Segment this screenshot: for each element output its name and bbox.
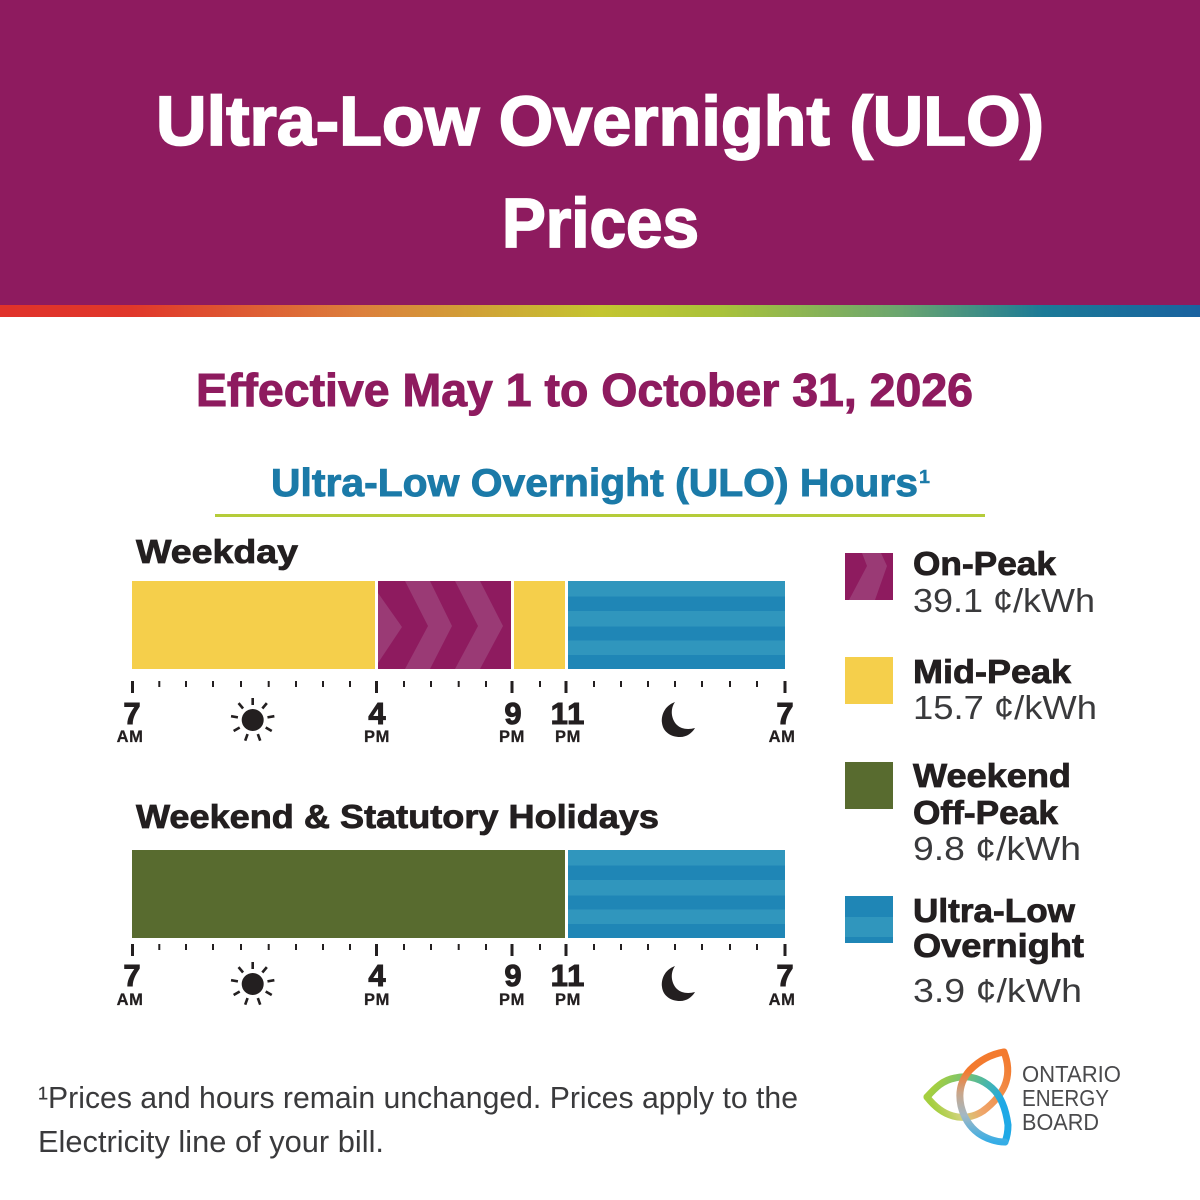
legend: weekend off-peak: Weekend bbox=[913, 757, 1071, 794]
legend: weekend off-peak bbox=[845, 757, 1081, 867]
legend: ultra-low overnight: 3.9 ¢/kWh bbox=[913, 972, 1082, 1009]
title: Ultra-Low Overnight (ULO) bbox=[156, 82, 1044, 160]
footnote bbox=[38, 1080, 798, 1159]
legend: on-peak: 39.1 ¢/kWh bbox=[913, 582, 1095, 619]
weekend time axis: AM bbox=[117, 991, 143, 1009]
rainbow gradient strip bbox=[0, 305, 1200, 317]
footnote: ¹Prices and hours remain unchanged. Prices apply to the bbox=[38, 1080, 798, 1115]
hours heading bbox=[215, 462, 985, 517]
legend: ultra-low overnight bbox=[845, 892, 1084, 1009]
weekday time axis: 9 bbox=[504, 696, 522, 731]
weekend time axis: 11 bbox=[551, 958, 585, 993]
logo wordmark: ONTARIO bbox=[1022, 1061, 1121, 1087]
weekday time axis: PM bbox=[364, 728, 390, 746]
legend: mid-peak: Mid-Peak bbox=[913, 653, 1072, 690]
weekend time axis: 9 bbox=[504, 958, 522, 993]
weekday time axis: 4 bbox=[368, 696, 386, 731]
logo wordmark bbox=[1022, 1061, 1121, 1135]
title: Prices bbox=[502, 184, 699, 262]
weekday time axis: 11 bbox=[551, 696, 585, 731]
weekday bar: mid-peak evening bbox=[514, 581, 565, 669]
icon: moon bbox=[662, 702, 695, 737]
weekday time axis: PM bbox=[499, 728, 525, 746]
weekday time axis: AM bbox=[117, 728, 143, 746]
footnote: Electricity line of your bill. bbox=[38, 1124, 384, 1159]
weekend time axis: PM bbox=[364, 991, 390, 1009]
legend: ultra-low overnight: Ultra-Low bbox=[913, 892, 1075, 929]
weekday heading: Weekday bbox=[136, 533, 299, 570]
legend: mid-peak: 15.7 ¢/kWh bbox=[913, 689, 1097, 726]
weekend time axis: 7 bbox=[776, 958, 794, 993]
panel: weekend schedule bbox=[117, 798, 795, 1009]
legend: weekend off-peak: 9.8 ¢/kWh bbox=[913, 830, 1081, 867]
weekday time axis: 7 bbox=[776, 696, 794, 731]
legend: weekend off-peak: Off-Peak bbox=[913, 794, 1059, 831]
weekend time axis: 7 bbox=[123, 958, 141, 993]
legend: on-peak bbox=[845, 545, 1095, 619]
weekend heading: Weekend & Statutory Holidays bbox=[136, 798, 659, 835]
hours heading: Ultra-Low Overnight (ULO) Hours bbox=[271, 462, 918, 505]
icon: moon bbox=[662, 966, 695, 1001]
icon: sun bbox=[231, 698, 274, 741]
weekend bar: off-peak bbox=[132, 850, 565, 938]
logo wordmark: ENERGY bbox=[1022, 1085, 1109, 1111]
weekend time axis: 4 bbox=[368, 958, 386, 993]
title bbox=[156, 82, 1044, 262]
weekend time axis: PM bbox=[499, 991, 525, 1009]
weekday bar: ultra-low overnight bbox=[568, 581, 785, 669]
icon: trefoil bbox=[927, 1052, 1008, 1142]
weekday time axis: AM bbox=[769, 728, 795, 746]
weekday bar: on-peak bbox=[378, 581, 511, 669]
header banner bbox=[0, 0, 1200, 305]
weekend time axis: AM bbox=[769, 991, 795, 1009]
weekday time axis: 7 bbox=[123, 696, 141, 731]
weekday time axis bbox=[117, 681, 795, 746]
weekday time axis: PM bbox=[555, 728, 581, 746]
logo: Ontario Energy Board bbox=[927, 1052, 1121, 1142]
panel: weekday schedule bbox=[117, 533, 795, 746]
icon: sun bbox=[231, 962, 274, 1005]
weekend bar: ultra-low overnight bbox=[568, 850, 785, 938]
logo wordmark: BOARD bbox=[1022, 1109, 1099, 1135]
weekday bar: mid-peak morning bbox=[132, 581, 375, 669]
panel: legend bbox=[845, 545, 1097, 1009]
legend: mid-peak bbox=[845, 653, 1097, 726]
weekend time axis bbox=[117, 944, 795, 1009]
legend: ultra-low overnight: Overnight bbox=[913, 927, 1084, 964]
effective date heading: Effective May 1 to October 31, 2026 bbox=[196, 364, 973, 416]
hours heading: 1 bbox=[919, 467, 930, 487]
weekend time axis: PM bbox=[555, 991, 581, 1009]
legend: on-peak: On-Peak bbox=[913, 545, 1057, 582]
